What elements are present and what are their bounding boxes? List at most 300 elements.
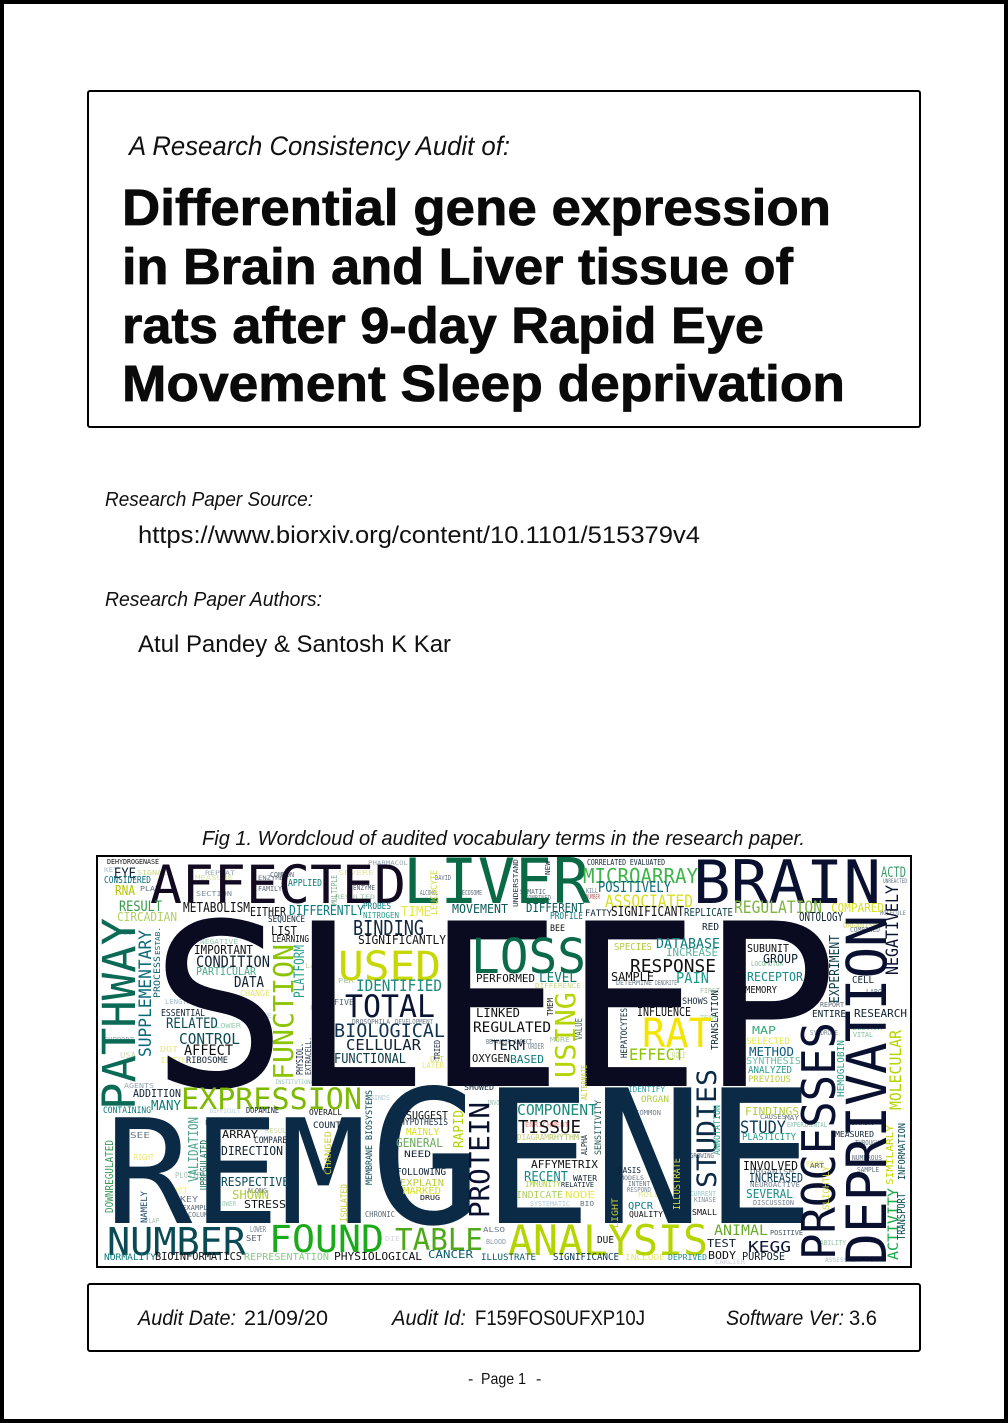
wordcloud medium terms: PAIN: [676, 969, 709, 987]
wordcloud small background terms: KEY: [104, 866, 119, 874]
wordcloud medium terms: AFFECT: [184, 1043, 234, 1059]
title: [122, 179, 845, 412]
wordcloud small background terms: SIZE: [113, 929, 133, 937]
wordcloud word: PROCESSES: PROCESSES: [792, 1022, 846, 1260]
wordcloud medium terms: COUNT: [313, 1121, 342, 1131]
wordcloud small background terms: CORTEX: [530, 1094, 559, 1102]
figure caption: Fig 1. Wordcloud of audited vocabulary terms in the research paper.: [202, 828, 805, 850]
wordcloud medium terms: LEVEL: [539, 971, 577, 986]
wordcloud small background terms: LATER: [422, 1061, 444, 1070]
wordcloud medium terms: LINKED: [476, 1006, 520, 1020]
wordcloud small background terms: EARLIER: [715, 1259, 745, 1266]
wordcloud medium terms: GENERAL: [396, 1136, 443, 1150]
wordcloud small background terms: COMMON: [270, 871, 294, 879]
wordcloud small background terms: BLOOD: [486, 1238, 506, 1246]
wordcloud small background terms: CURRENT: [690, 1190, 717, 1198]
wordcloud medium terms: BINDING: [353, 916, 424, 940]
wordcloud medium terms: SMALL: [692, 1208, 717, 1217]
page number: -: [468, 1371, 473, 1388]
wordcloud medium terms: APPLIED: [288, 878, 322, 889]
wordcloud small background terms: ECOSOME: [462, 889, 482, 897]
wordcloud small background terms: ORDER: [528, 1042, 544, 1051]
wordcloud small background terms: COMBINED: [850, 926, 880, 934]
wordcloud medium terms: MEMORY: [745, 985, 777, 996]
wordcloud small background terms: ABILITY: [820, 1239, 847, 1247]
wordcloud small background terms: DROSOPHILA: [352, 1018, 391, 1026]
wordcloud medium terms: RNA: [115, 884, 135, 899]
wordcloud small background terms: FIVE: [334, 998, 354, 1007]
wordcloud medium terms: DATA: [234, 973, 264, 991]
wordcloud word: BRAIN: BRAIN: [693, 848, 881, 918]
wordcloud medium terms: HEPATOCYTES: [620, 1008, 630, 1058]
wordcloud medium terms: CELL: [852, 975, 874, 986]
wordcloud medium terms: CONSIDERED: [104, 875, 151, 886]
wordcloud medium terms: TRANSPORT: [895, 1193, 908, 1240]
research paper authors: [105, 589, 451, 658]
wordcloud word: NUMBER: NUMBER: [107, 1220, 246, 1264]
wordcloud medium terms: DOPAMINE: [246, 1106, 279, 1115]
wordcloud medium terms: DIRECTION: [221, 1144, 283, 1158]
wordcloud small background terms: NEUROACTIVE: [750, 1181, 800, 1189]
wordcloud small background terms: BEHAVIOR ASPECT: [486, 1038, 533, 1046]
wordcloud small background terms: USA: [120, 1051, 136, 1060]
wordcloud word: EXPRESSION: EXPRESSION: [181, 1082, 362, 1116]
wordcloud medium terms: ANALYZED: [748, 1065, 792, 1076]
wordcloud small background terms: ART: [810, 1162, 825, 1170]
wordcloud small background terms: ORGANISM: [750, 1168, 794, 1176]
wordcloud medium terms: DATABASE: [656, 937, 720, 952]
wordcloud medium terms: SYNTHESIS: [746, 1056, 801, 1067]
wordcloud medium terms: BEE: [550, 924, 565, 934]
wordcloud small background terms: EXPERIMENTAL: [787, 1121, 827, 1129]
wordcloud medium terms: TMEM: [546, 998, 555, 1016]
wordcloud small background terms: KILL: [586, 887, 598, 895]
wordcloud medium terms: RAPID: [452, 1110, 467, 1148]
wordcloud medium terms: METHOD: [749, 1045, 794, 1059]
wordcloud medium terms: PERFORMED: [476, 972, 535, 985]
wordcloud small background terms: SEVERE: [338, 869, 374, 877]
wordcloud small background terms: SAMPLE: [857, 1166, 879, 1174]
wordcloud medium terms: ARRAY: [222, 1128, 258, 1141]
wordcloud small background terms: SUPPORT: [104, 1036, 135, 1044]
wordcloud medium terms: IDENTIFIED: [356, 976, 442, 995]
wordcloud word: PATHWAY: PATHWAY: [93, 918, 146, 1110]
wordcloud medium terms: ILLUSTRATE: [481, 1253, 536, 1263]
wordcloud medium terms: BODY: [708, 1249, 736, 1262]
wordcloud medium terms: ALTERNATE: [580, 1065, 589, 1100]
wordcloud medium terms: INFORMATION: [897, 1123, 908, 1180]
audit id: [390, 1307, 645, 1330]
wordcloud word: LIVER: LIVER: [403, 845, 591, 918]
wordcloud small background terms: LARGE: [866, 988, 886, 996]
wordcloud medium terms: TRANSLATION: [710, 990, 721, 1050]
wordcloud medium terms: NORMALITY: [104, 1253, 157, 1263]
research paper authors: Atul Pandey & Santosh K Kar: [138, 631, 451, 658]
wordcloud medium terms: ANIMAL: [714, 1223, 768, 1239]
wordcloud medium terms: OXYGEN: [472, 1052, 510, 1065]
wordcloud medium terms: NEED: [404, 1150, 431, 1160]
wordcloud medium terms: WATER: [573, 1174, 597, 1183]
wordcloud medium terms: SLIGHTLY: [822, 1165, 832, 1210]
wordcloud medium terms: ENTIRE: [812, 1009, 846, 1020]
wordcloud medium terms: STUDY: [740, 1118, 786, 1138]
wordcloud small background terms: DIAGRAM: [517, 1133, 549, 1142]
wordcloud medium terms: DOWNREGULATED: [103, 1140, 116, 1213]
wordcloud medium terms: SIGNIFICANTLY: [358, 933, 447, 947]
wordcloud medium terms: REGULATED: [473, 1020, 551, 1036]
research paper source: [105, 489, 700, 549]
wordcloud small background terms: GROWING: [690, 1152, 714, 1160]
wordcloud medium terms: PROCESS: [153, 956, 163, 998]
wordcloud medium terms: IMMUNITY: [525, 1180, 561, 1189]
wordcloud medium terms: PHYSIOLOGICAL: [334, 1250, 422, 1263]
wordcloud small background terms: RIGHT: [134, 1153, 154, 1162]
title: rats after 9-day Rapid Eye: [122, 297, 764, 354]
wordcloud small background terms: SOMATIC: [520, 888, 546, 896]
wordcloud small background terms: COLUMN: [188, 1211, 212, 1219]
wordcloud small background terms: UNREACTED: [883, 878, 907, 885]
wordcloud small background terms: KEY: [180, 1195, 198, 1204]
wordcloud small background terms: VITAL: [853, 1031, 873, 1039]
wordcloud medium terms: RECEPTOR: [747, 970, 804, 984]
wordcloud medium terms: PROFILE: [550, 911, 583, 922]
wordcloud small background terms: INCLUDE: [625, 1253, 665, 1262]
wordcloud small background terms: SEE: [130, 1131, 150, 1140]
wordcloud medium terms: FUNCTIONAL: [334, 1052, 406, 1067]
wordcloud medium terms: MEMBRANE BIOSYSTEMS: [365, 1090, 375, 1185]
wordcloud small background terms: ROLE: [672, 1051, 686, 1060]
wordcloud medium terms: NEGATIVELY: [883, 885, 903, 975]
wordcloud small background terms: PHARMACOL: [368, 860, 408, 867]
wordcloud medium terms: PHYSIOL.: [295, 1043, 306, 1075]
wordcloud medium terms: SAMPLE: [611, 970, 654, 984]
wordcloud small background terms: LOWER: [215, 1022, 242, 1030]
wordcloud small background terms: REPEAT: [205, 870, 236, 877]
wordcloud small background terms: PLOTTED: [175, 1171, 205, 1180]
wordcloud small background terms: SET: [246, 1234, 262, 1243]
wordcloud small background terms: BINDS: [370, 1094, 390, 1102]
wordcloud medium terms: EXPERIMENT: [828, 935, 843, 1003]
wordcloud small background terms: KINASE: [694, 1196, 716, 1204]
wordcloud small background terms: PLAY: [140, 885, 161, 893]
wordcloud medium terms: CONDITION: [196, 952, 270, 971]
wordcloud small background terms: CHRONIC: [365, 1210, 395, 1219]
wordcloud medium terms: SEQUENCE: [268, 915, 305, 925]
wordcloud medium terms: ORGAN: [641, 1095, 669, 1105]
wordcloud medium terms: CONTAINING: [103, 1106, 151, 1116]
wordcloud medium terms: DUE: [597, 1235, 614, 1246]
wordcloud medium terms: RESEARCH: [854, 1007, 907, 1020]
wordcloud small background terms: NUMBER: [586, 893, 600, 901]
wordcloud small background terms: CHANGE: [240, 989, 270, 998]
wordcloud small background terms: FIRST: [700, 987, 721, 995]
wordcloud small background terms: MEASURE: [195, 874, 233, 882]
wordcloud medium terms: SIMILARLY: [885, 1125, 896, 1185]
wordcloud word: DEPRIVATION: DEPRIVATION: [835, 915, 899, 1265]
wordcloud medium terms: MOVEMENT: [452, 902, 508, 916]
title: in Brain and Liver tissue of: [122, 238, 794, 295]
wordcloud medium terms: PROBES: [363, 902, 391, 912]
wordcloud medium terms: SELECTED: [746, 1037, 790, 1047]
wordcloud medium terms: REPRESENTATION: [244, 1252, 329, 1263]
wordcloud small background terms: COMMON: [635, 1109, 661, 1117]
audit id: Audit Id:: [390, 1307, 466, 1330]
wordcloud medium terms: NODE: [565, 1190, 595, 1201]
wordcloud medium terms: POSITIVELY: [598, 878, 671, 896]
wordcloud small background terms: SYNDROME: [810, 1029, 838, 1037]
wordcloud medium terms: VALIDATION: [187, 1117, 202, 1182]
wordcloud small background terms: ESTABLISH: [205, 1119, 245, 1127]
wordcloud small background terms: MODELS: [620, 1175, 644, 1182]
wordcloud medium terms: ESTAB.: [154, 927, 162, 955]
wordcloud medium terms: ALPHA: [580, 1135, 589, 1155]
wordcloud word: USING: USING: [549, 992, 582, 1078]
wordcloud small background terms: ASSESSMENT FORMS: [825, 1257, 885, 1264]
audit date: 21/09/20: [244, 1307, 328, 1330]
wordcloud medium terms: AFFYMETRIX: [531, 1158, 598, 1171]
wordcloud word: FOUND: FOUND: [269, 1218, 384, 1261]
wordcloud medium terms: QUALITY: [629, 1210, 663, 1219]
wordcloud medium terms: QPCR: [628, 1201, 654, 1212]
wordcloud medium terms: RED: [702, 922, 719, 933]
research paper authors: Research Paper Authors:: [105, 589, 322, 611]
wordcloud small background terms: OWER: [222, 1200, 237, 1208]
wordcloud small background terms: DETERMINE: [616, 979, 652, 987]
wordcloud small background terms: DOT: [160, 1045, 178, 1054]
wordcloud medium terms: INFLUENCE: [637, 1005, 691, 1019]
wordcloud medium terms: COMPARED: [831, 901, 884, 915]
audit id: F159FOS0UFXP10J: [475, 1307, 645, 1330]
wordcloud word: ANALYSIS: ANALYSIS: [508, 1216, 708, 1265]
wordcloud medium terms: LIGHT: [611, 1197, 621, 1228]
wordcloud small background terms: ENRICHMENT: [525, 1121, 570, 1129]
wordcloud medium terms: MEASURED: [835, 1130, 874, 1139]
wordcloud word: RAT: RAT: [642, 1011, 712, 1057]
wordcloud medium terms: RESPONSE: [630, 956, 716, 977]
wordcloud small background terms: REPORT: [820, 1001, 845, 1009]
wordcloud small background terms: WAYS: [444, 1094, 460, 1102]
wordcloud word: SLEEP: SLEEP: [150, 875, 839, 1140]
wordcloud small background terms: FLAP: [145, 1217, 159, 1225]
wordcloud small background terms: ALONG: [247, 1187, 267, 1195]
audit date: Audit Date:: [136, 1307, 236, 1330]
wordcloud small background terms: COMBINED: [525, 894, 551, 902]
wordcloud medium terms: PURPOSE: [742, 1250, 785, 1263]
title: Differential gene expression: [122, 179, 831, 236]
software version: 3.6: [849, 1307, 877, 1330]
wordcloud medium terms: SUPPLEMENTARY: [136, 930, 156, 1057]
wordcloud small background terms: MORE: [550, 1036, 570, 1044]
wordcloud small background terms: ALSO: [483, 1226, 505, 1234]
wordcloud medium terms: EXPLAIN: [400, 1178, 444, 1189]
wordcloud word: PROTEIN: PROTEIN: [463, 1102, 496, 1218]
wordcloud medium terms: DEHYDROGENASE: [107, 858, 159, 866]
wordcloud small background terms: EXAMPLE: [182, 1204, 212, 1212]
wordcloud medium terms: NITROGEN: [363, 911, 399, 920]
wordcloud medium terms: COMPONENT: [517, 1101, 597, 1119]
wordcloud medium terms: EITHER: [250, 905, 287, 919]
wordcloud medium terms: MARKED: [403, 1186, 441, 1197]
wordcloud medium terms: EXTRACELL.: [304, 1037, 313, 1075]
wordcloud medium terms: TRIED: [433, 1040, 442, 1060]
wordcloud small background terms: THROUGH: [855, 1139, 879, 1147]
wordcloud medium terms: MAINLY: [406, 1127, 439, 1138]
wordcloud medium terms: IDENTIFY: [628, 1085, 665, 1094]
wordcloud medium terms: MANY: [151, 1099, 181, 1114]
wordcloud medium terms: ILLUSTRATE: [672, 1158, 683, 1210]
wordcloud small background terms: DAVID: [435, 874, 451, 882]
wordcloud small background terms: DIE: [385, 1235, 400, 1243]
wordcloud medium terms: MULTIPLE: [330, 875, 339, 905]
wordcloud medium terms: DRUG: [420, 1194, 440, 1202]
wordcloud small background terms: RESULTED: [335, 894, 376, 901]
wordcloud small background terms: DIFFICULT: [210, 1108, 240, 1115]
wordcloud medium terms: BIOLOGICAL: [334, 1020, 445, 1042]
wordcloud small background terms: BLOCKING: [848, 1119, 874, 1127]
wordcloud medium terms: RELATIVE: [561, 1181, 594, 1189]
panel: title box: [88, 91, 920, 427]
wordcloud medium terms: INCREASE: [666, 946, 718, 959]
wordcloud medium terms: HYPOTHESIS: [400, 1118, 448, 1128]
wordcloud medium terms: SPECIES: [614, 942, 652, 953]
wordcloud small background terms: INVOLVING: [487, 1099, 515, 1107]
wordcloud medium terms: EYE: [114, 866, 136, 882]
audit date: [136, 1307, 328, 1330]
wordcloud medium terms: [103, 858, 908, 1263]
wordcloud medium terms: LEARNING: [272, 934, 309, 945]
wordcloud medium terms: ACTD: [881, 865, 906, 881]
wordcloud medium terms: PLASTICITY: [742, 1132, 796, 1143]
wordcloud medium terms: DEPRIVED: [668, 1253, 707, 1262]
wordcloud medium terms: TIME: [401, 905, 431, 920]
wordcloud medium terms: SHOWED: [464, 1083, 494, 1092]
wordcloud word: AFFECTED: AFFECTED: [150, 855, 406, 916]
wordcloud medium terms: INCREASED: [749, 1171, 803, 1185]
wordcloud medium terms: ASSOCIATED: [605, 892, 693, 912]
wordcloud medium terms: REGULATION: [734, 898, 822, 918]
wordcloud small background terms: ALCOHOL: [420, 889, 438, 897]
page number: Page 1: [481, 1371, 526, 1388]
wordcloud medium terms: HEMOGLOBIN: [836, 1040, 847, 1097]
wordcloud small background terms: SIGNAL: [137, 869, 167, 877]
wordcloud small background terms: INTO: [160, 1056, 184, 1065]
wordcloud medium terms: SIGNIFICANCE: [553, 1252, 619, 1263]
wordcloud medium terms: GROUP: [763, 952, 798, 966]
audit kicker: A Research Consistency Audit of:: [127, 131, 510, 161]
wordcloud small background terms: ENZYME: [258, 875, 284, 882]
wordcloud small background terms: FAMILY: [258, 885, 283, 893]
wordcloud small background terms: GENOME: [240, 1012, 272, 1020]
wordcloud medium terms: TISSUE: [518, 1117, 581, 1138]
wordcloud medium terms: INVOLVED: [743, 1159, 798, 1173]
wordcloud small background terms: FIGURE: [310, 1004, 335, 1012]
wordcloud medium terms: POSITIVE: [770, 1229, 803, 1237]
wordcloud medium terms: DIFFERENT: [526, 901, 584, 915]
wordcloud small background terms: DIFFERENCE: [535, 982, 581, 990]
wordcloud word: FUNCTION: FUNCTION: [267, 944, 300, 1080]
wordcloud medium terms: MOLECULAR: [886, 1030, 905, 1110]
wordcloud small background terms: TEAM: [700, 1014, 716, 1022]
wordcloud word: STUDIES: STUDIES: [692, 1069, 723, 1188]
wordcloud medium terms: FATTY: [585, 909, 613, 919]
wordcloud medium terms: BASED: [510, 1053, 544, 1066]
wordcloud medium terms: SEVERAL: [746, 1187, 793, 1201]
wordcloud word: GENE: GENE: [370, 1050, 815, 1267]
wordcloud medium terms: RESPECTIVE: [221, 1175, 289, 1189]
wordcloud small background terms: RHYTHM: [549, 1133, 579, 1142]
wordcloud small background terms: NUMEROUS: [852, 1154, 882, 1162]
wordcloud medium terms: IMPORTANT: [194, 943, 253, 957]
wordcloud small background terms: AGENTS: [124, 1082, 154, 1090]
wordcloud medium terms: ACTIVITY: [886, 1187, 902, 1260]
wordcloud small background terms: RESPOND: [627, 1186, 651, 1194]
wordcloud small background terms: SECTION: [196, 890, 232, 898]
wordcloud medium terms: KEGG: [748, 1238, 791, 1256]
wordcloud medium terms: UPREGULATED: [199, 1140, 210, 1190]
wordcloud medium terms: TERM: [491, 1039, 525, 1054]
wordcloud medium terms: UNDERSTAND: [512, 859, 520, 907]
wordcloud small background terms: ROLE: [638, 1191, 660, 1199]
wordcloud small background terms: INSTITUTIONAL: [275, 1079, 317, 1086]
wordcloud medium terms: OVERALL: [309, 1108, 342, 1117]
wordcloud medium terms: BIOINFORMATICS: [155, 1250, 242, 1263]
wordcloud small background terms: RESULTS: [265, 1127, 295, 1135]
wordcloud medium terms: SUBUNIT: [747, 942, 789, 955]
wordcloud word: REM: REM: [105, 1089, 367, 1258]
wordcloud medium terms: ESSENTIAL: [161, 1008, 205, 1019]
wordcloud medium terms: VALUE: [574, 1018, 585, 1040]
wordcloud small background terms: LOCOMOTOR: [751, 960, 784, 968]
wordcloud medium terms: RESULT: [119, 899, 162, 915]
wordcloud medium terms: BASIS: [618, 1166, 641, 1175]
wordcloud small background terms: CAUSES: [760, 1113, 786, 1121]
wordcloud medium terms: NEW: [544, 860, 552, 875]
wordcloud small background terms: LENGTH: [165, 998, 191, 1006]
wordcloud small background terms: ENZYME: [353, 884, 375, 892]
wordcloud small background terms: DEVELOPMENT: [395, 1018, 434, 1026]
wordcloud medium terms: SHOWS: [682, 997, 708, 1007]
wordcloud medium terms: METABOLISM: [183, 901, 250, 916]
wordcloud small background terms: DENDRITE: [655, 979, 677, 987]
wordcloud medium terms: TEST: [707, 1237, 736, 1250]
wordcloud medium terms: LIST: [271, 924, 297, 938]
wordcloud medium terms: MAP: [752, 1024, 776, 1037]
wordcloud medium terms: CELLULAR: [346, 1036, 422, 1054]
wordcloud small background terms: ORGANISM: [843, 921, 877, 930]
wordcloud medium terms: CORRELATED EVALUATED: [587, 858, 665, 867]
wordcloud small background terms: BIO: [580, 1200, 594, 1208]
page number: -: [536, 1371, 541, 1388]
wordcloud medium terms: ONTOLOGY: [799, 910, 844, 924]
wordcloud medium terms: FINDINGS: [745, 1105, 799, 1118]
research paper source: https://www.biorxiv.org/content/10.1101/515379v4: [138, 522, 700, 549]
wordcloud word: TOTAL: TOTAL: [345, 989, 435, 1025]
wordcloud small background terms: [104, 860, 907, 1266]
wordcloud medium terms: CHANGED: [324, 1131, 334, 1175]
wordcloud medium terms: DIFFERENTLY: [289, 904, 364, 919]
wordcloud small background terms: FOUND: [806, 1160, 824, 1169]
title: Movement Sleep deprivation: [122, 355, 845, 412]
wordcloud medium terms: EFFECT: [629, 1045, 684, 1064]
wordcloud medium terms: INDICATE: [516, 1190, 563, 1201]
wordcloud medium terms: COMPARE: [254, 1136, 287, 1146]
wordcloud small background terms: ID: [610, 1092, 620, 1100]
wordcloud small background terms: MAY: [785, 1114, 800, 1122]
wordcloud medium terms: PREVIOUS: [748, 1075, 791, 1085]
wordcloud medium terms: SIGNIFICANT: [611, 905, 684, 920]
wordcloud medium terms: LEUCOCYTE: [430, 870, 440, 915]
wordcloud small background terms: NEGATIVE: [200, 938, 238, 946]
